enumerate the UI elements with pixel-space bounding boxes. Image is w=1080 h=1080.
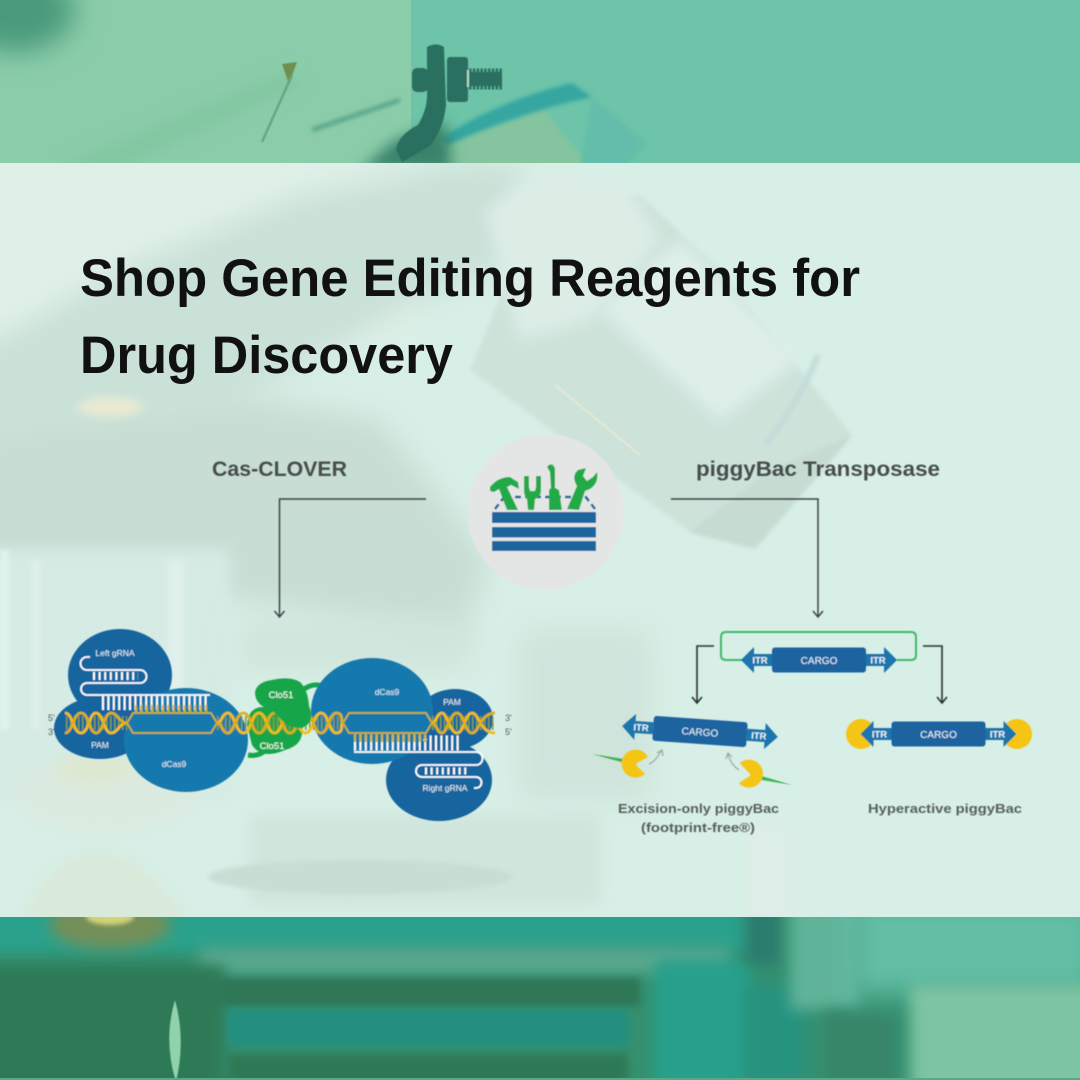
hyperactive transposon: CARGO (920, 730, 957, 741)
strand end labels (48, 713, 512, 737)
heading: Cas-CLOVER: Cas-CLOVER (212, 458, 347, 481)
Clo51 lower blob (247, 707, 302, 754)
label: excision-only piggyBac: Excision-only piggyBac (618, 801, 779, 816)
right dCas9 lobe: dCas9 (375, 687, 400, 697)
left dCas9 lobe (124, 688, 248, 792)
stage (256, 821, 594, 899)
left PAM lobe: PAM (91, 740, 109, 750)
right PAM lobe: PAM (443, 697, 461, 707)
strand end labels: 3' (505, 713, 512, 723)
Clo51 lower blob: Clo51 (260, 741, 284, 752)
Clo51 linkers (248, 685, 322, 755)
strand end labels: 5' (48, 713, 55, 723)
heading: piggyBac Transposase: piggyBac Transposase (696, 458, 940, 481)
arrow: to piggyBac diagram (671, 499, 823, 617)
green plasmid loop (721, 632, 916, 660)
wrench (567, 468, 597, 510)
hyperactive transposon: ITR (872, 730, 887, 740)
excision-only transposon: ITR (751, 731, 767, 743)
right gRNA lobe: Right gRNA (423, 783, 468, 793)
hammer (490, 477, 519, 510)
excision enzymes (592, 750, 792, 789)
excision-only transposon (621, 713, 779, 750)
title: Shop Gene Editing Reagents for (80, 249, 860, 308)
fork wrench (524, 476, 541, 510)
right gRNA strand (354, 738, 483, 788)
bottom photo band: blurred microscope base (0, 917, 1080, 1080)
excision-only transposon: CARGO (681, 726, 719, 740)
title (80, 249, 860, 385)
top transposon: ITR CARGO ITR: ITR (752, 656, 768, 666)
left gRNA lobe: Left gRNA (95, 648, 135, 658)
left gRNA lobe (68, 629, 172, 721)
black arrow: to excision-only (692, 646, 714, 703)
black arrow: to hyperactive (923, 646, 947, 703)
title: Drug Discovery (80, 326, 453, 385)
right PAM lobe (417, 689, 493, 749)
screwdriver (547, 464, 562, 510)
top photo band: microscope detail (0, 0, 1080, 170)
DNA double helix with two open bubbles (65, 713, 495, 733)
excision-only transposon: ITR (633, 722, 649, 734)
strand end labels: 3' (48, 727, 55, 737)
hyperactive transposon (860, 721, 1016, 747)
right dCas9 lobe (311, 658, 433, 764)
hyperactive enzymes (846, 719, 1032, 749)
strand end labels: 5' (505, 727, 512, 737)
icon: toolbox in circle (468, 434, 624, 590)
left dCas9 lobe: dCas9 (162, 759, 187, 769)
left PAM lobe (54, 697, 146, 759)
column (10, 550, 230, 596)
diagram: piggyBac (592, 632, 1032, 835)
arrow: to Cas-CLOVER diagram (274, 499, 426, 617)
label: hyperactive piggyBac: Hyperactive piggyBac (868, 801, 1022, 816)
label: excision-only piggyBac (618, 801, 779, 835)
right gRNA lobe (386, 739, 492, 821)
top transposon: ITR CARGO ITR: ITR (870, 656, 886, 666)
top transposon: ITR CARGO ITR: CARGO (801, 656, 838, 667)
hyperactive transposon: ITR (990, 730, 1005, 740)
left gRNA strand (80, 657, 210, 709)
top transposon: ITR CARGO ITR (741, 647, 897, 673)
Clo51 upper blob (255, 678, 311, 728)
lens (470, 195, 852, 548)
Clo51 upper blob: Clo51 (269, 690, 293, 701)
label: excision-only piggyBac: (footprint-free®) (641, 820, 755, 835)
middle translucent panel with faded microscope (0, 165, 850, 917)
diagram: Cas-CLOVER (48, 629, 512, 821)
bolt (396, 44, 502, 162)
